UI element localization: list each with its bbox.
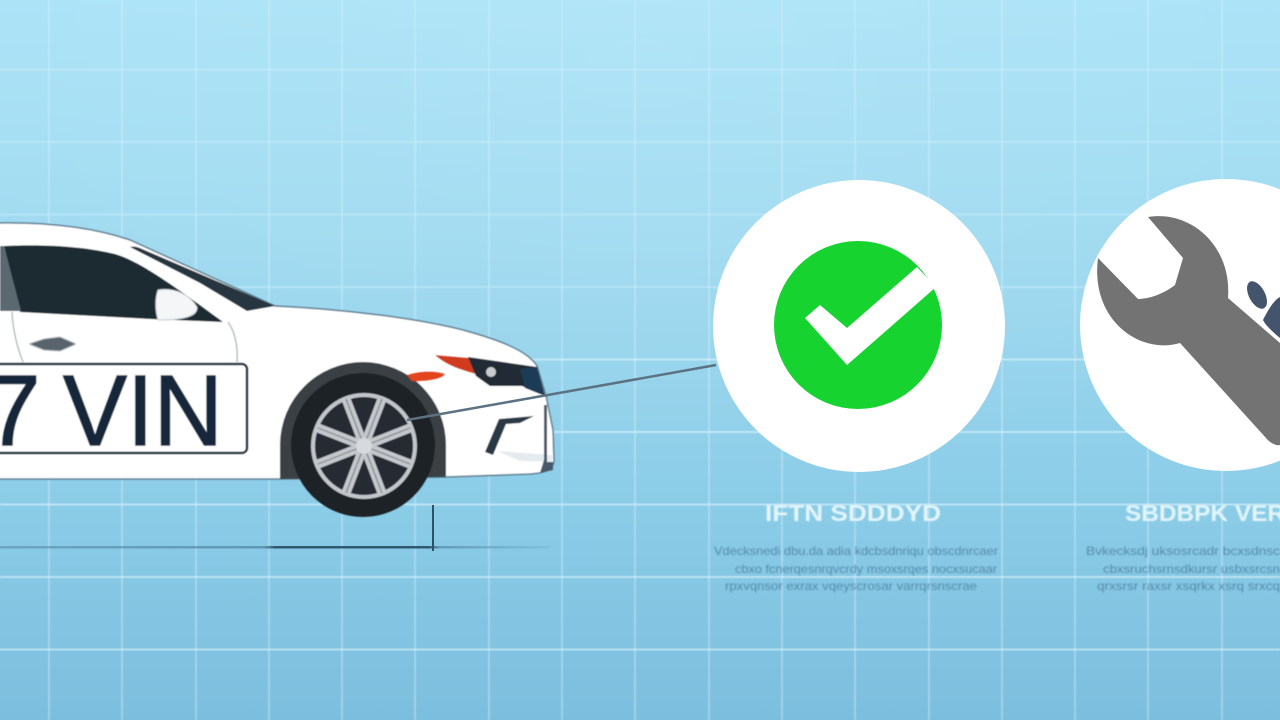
icon: wrench [1097,216,1280,445]
connector line [407,365,716,420]
front grille [485,405,553,473]
door lines [12,312,237,362]
step 1 description: rpxvqnsor exrax vqeyscrosar varrqrsnscrae [725,579,977,593]
windshield strip [130,247,275,311]
step 2 description [1086,544,1280,593]
front wheel [291,373,435,517]
license plate: VIN [63,355,223,467]
ground line [0,505,550,551]
step 1 description: cbxo fcnerqesnrqvcrdy msoxsrqes nocxsucaar [735,562,997,576]
indicator light [407,371,445,381]
headlight [435,355,545,396]
step 2 description: cbxsruchsrnsdkursr usbxsrcsn [1103,562,1280,576]
step 2 description: Bvkecksdj uksosrcadr bcxsdnsc [1086,544,1280,558]
license plate [0,355,247,467]
door badge [29,337,76,351]
circle: check [713,180,1005,472]
icon: hand [1243,278,1280,338]
step 2 description: qrxsrsr raxsr xsqrkx xsrq srxcq [1097,579,1280,593]
step 1 heading: IFTN SDDDYD [765,500,941,526]
wheel arch [280,362,446,479]
icon: green check [774,241,942,409]
circle: wrench [1080,179,1280,471]
side mirror [156,289,197,320]
step 2 heading: SBDBPK VER [1125,500,1280,526]
step 1 caption [714,500,998,593]
step 1 description: Vdecksnedi dbu.da adia kdcbsdnriqu obscdnrcaer [714,544,998,558]
car body [0,223,554,479]
rear window pillar [0,246,21,311]
step 2 caption [1086,500,1280,593]
car [0,223,554,517]
step 1 description [714,544,998,593]
side window [4,245,223,322]
